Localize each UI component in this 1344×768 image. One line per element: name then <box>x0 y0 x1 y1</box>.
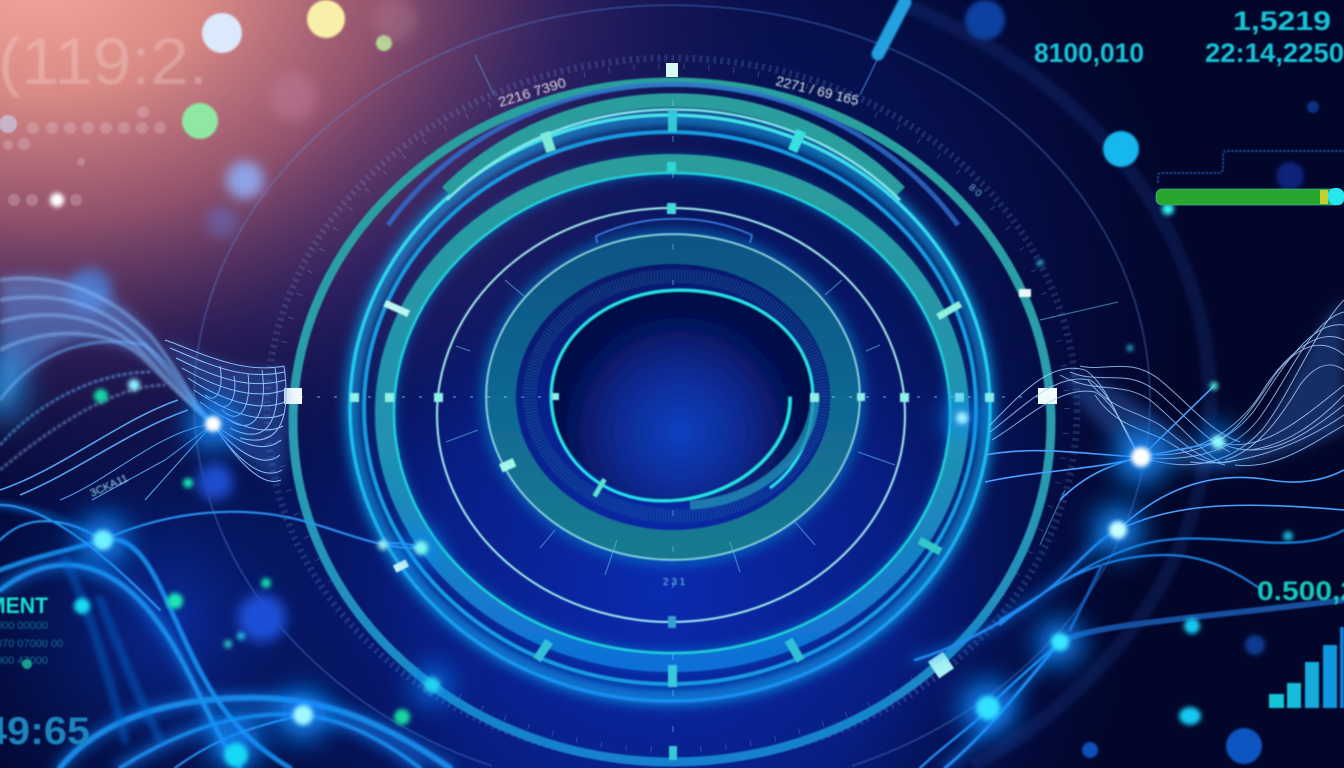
bracket arc <box>596 219 752 243</box>
faint outer dial rings <box>194 2 1210 766</box>
readout: top left <box>0 24 208 206</box>
label: upper right dial: 2271 / 69 165 <box>774 72 861 109</box>
hazy ribbon <box>0 276 288 482</box>
left lines to focal <box>0 400 213 500</box>
ring: inner cyan <box>551 290 815 505</box>
marker: top square <box>666 63 678 77</box>
marker: right square <box>1038 388 1057 404</box>
hazy ribbon <box>1060 300 1344 469</box>
text: top left number: (119:2. <box>0 24 208 98</box>
bar: top slanted capsule <box>860 2 905 95</box>
node halos <box>79 400 1234 766</box>
dotted row <box>0 106 166 206</box>
bottom right light strands <box>915 530 1344 768</box>
rows of small values <box>0 620 63 667</box>
core disc <box>550 290 814 502</box>
arc: blue upper <box>388 84 958 225</box>
strand glow <box>0 565 450 768</box>
progress bar <box>1156 151 1344 205</box>
right mesh wave <box>985 300 1344 530</box>
number: 1,5219: 1,5219 <box>1233 6 1331 36</box>
ring: thick teal band <box>384 163 960 663</box>
ring: middle band <box>486 234 860 560</box>
readout: bottom left panel <box>0 593 90 753</box>
dial small labels <box>496 72 984 588</box>
left mesh wave <box>0 276 288 500</box>
number: 22:14,2250: 22:14,2250 <box>1205 38 1344 68</box>
label: right dial: 8 0 <box>966 182 984 200</box>
bottom left light strands <box>0 505 450 768</box>
marker: left square <box>284 388 302 404</box>
ring: scale ticks <box>530 276 822 516</box>
node mid glow <box>50 193 1293 767</box>
ring: cyan pair <box>350 100 990 701</box>
right glowing lines <box>985 386 1344 530</box>
concentric dial <box>293 82 1051 762</box>
small mesh label: 3CKA11 <box>88 472 130 500</box>
ring: white thin <box>437 208 905 622</box>
label: upper left dial: 2216 7390 <box>496 74 568 110</box>
ring glow layer <box>352 118 988 698</box>
ring: outer teal <box>293 82 1051 762</box>
readout: top right numbers <box>1034 6 1344 68</box>
glowing nodes <box>50 193 1293 767</box>
crosshair and markers <box>284 2 1118 760</box>
left edge cyan haze <box>0 347 27 423</box>
bar chart: bottom right <box>1269 627 1344 708</box>
number: 8100,010: 8100,010 <box>1034 38 1144 68</box>
radial tick marks <box>446 55 1118 575</box>
label: bottom dial: 2 3 1 <box>663 577 686 588</box>
